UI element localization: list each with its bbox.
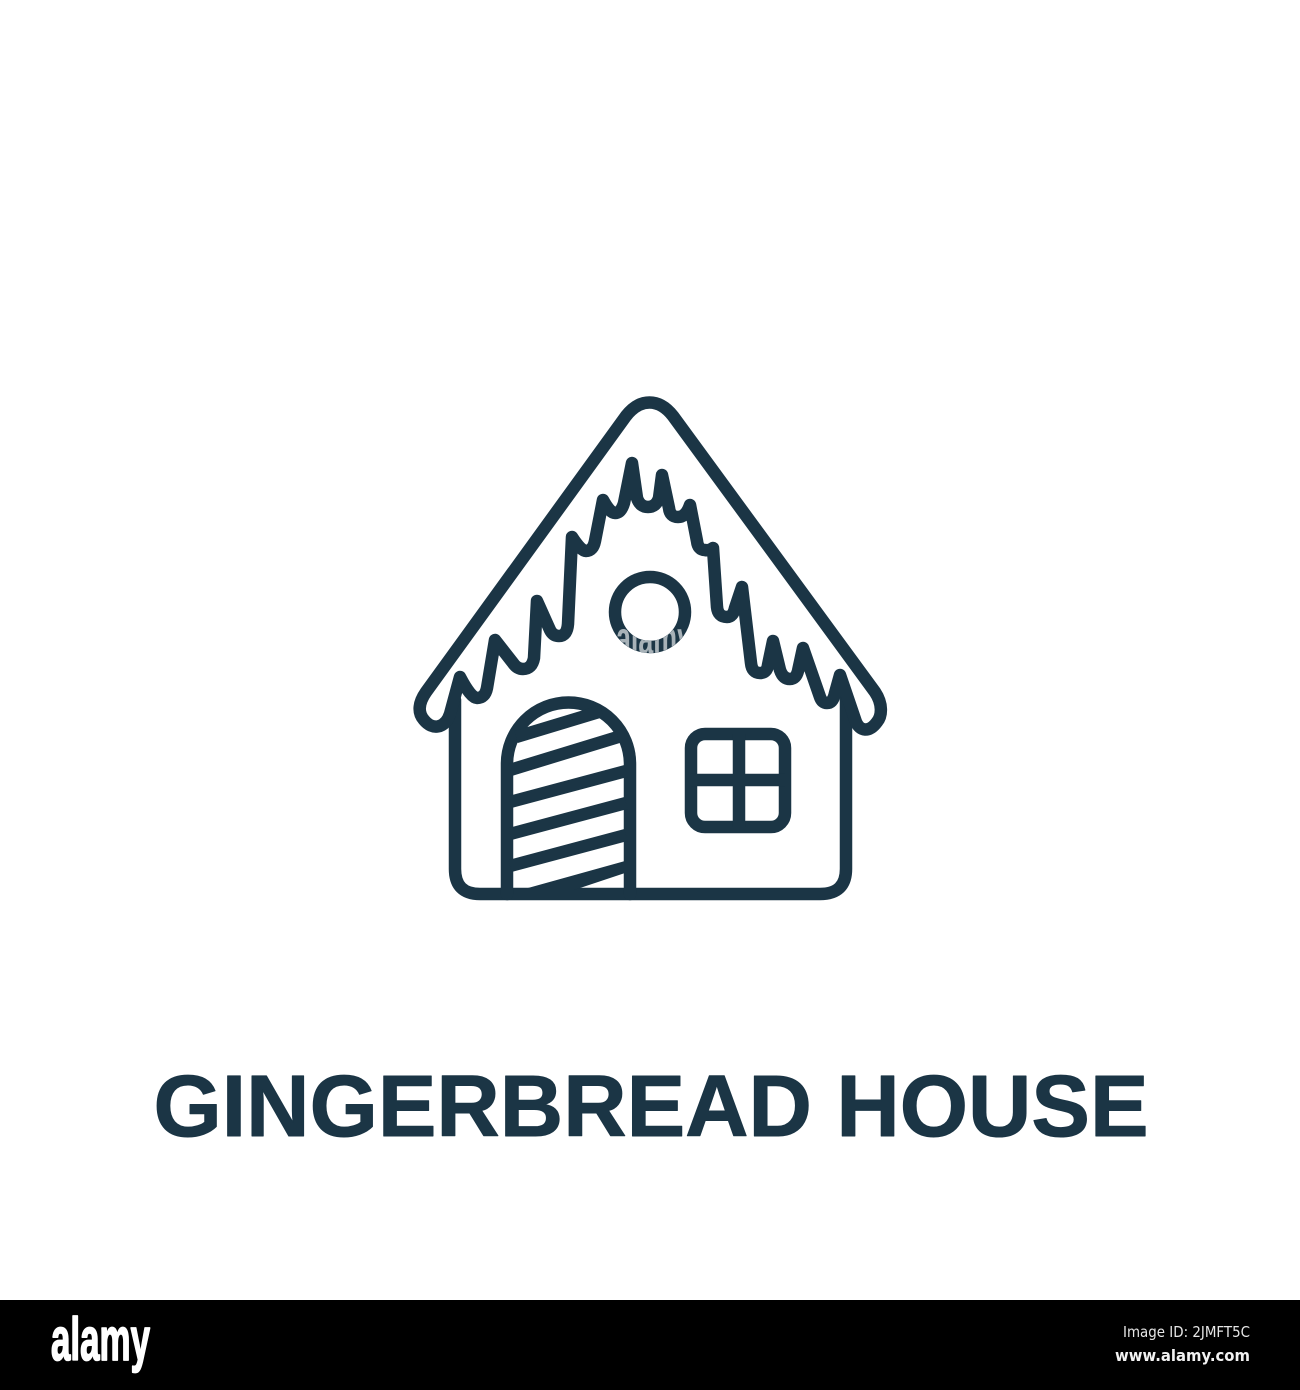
window cross: [691, 734, 785, 827]
door stripes: [510, 711, 626, 866]
footer bar: [0, 1300, 1300, 1390]
house walls: [455, 695, 846, 894]
square window: [691, 734, 785, 827]
watermark on attic window: alamy: [616, 612, 692, 664]
round attic window: [615, 577, 685, 647]
roof with icing: [420, 402, 881, 730]
door bottom stripe: [528, 861, 625, 894]
footer logo: alamy: [51, 1306, 150, 1373]
title: GINGERBREAD HOUSE: [154, 1058, 1148, 1155]
image id: Image ID: 2JMFT5C: [1123, 1323, 1250, 1341]
icon: gingerbread house: [420, 402, 881, 894]
door arch: [507, 702, 630, 894]
website: www.alamy.com: [1115, 1346, 1250, 1365]
